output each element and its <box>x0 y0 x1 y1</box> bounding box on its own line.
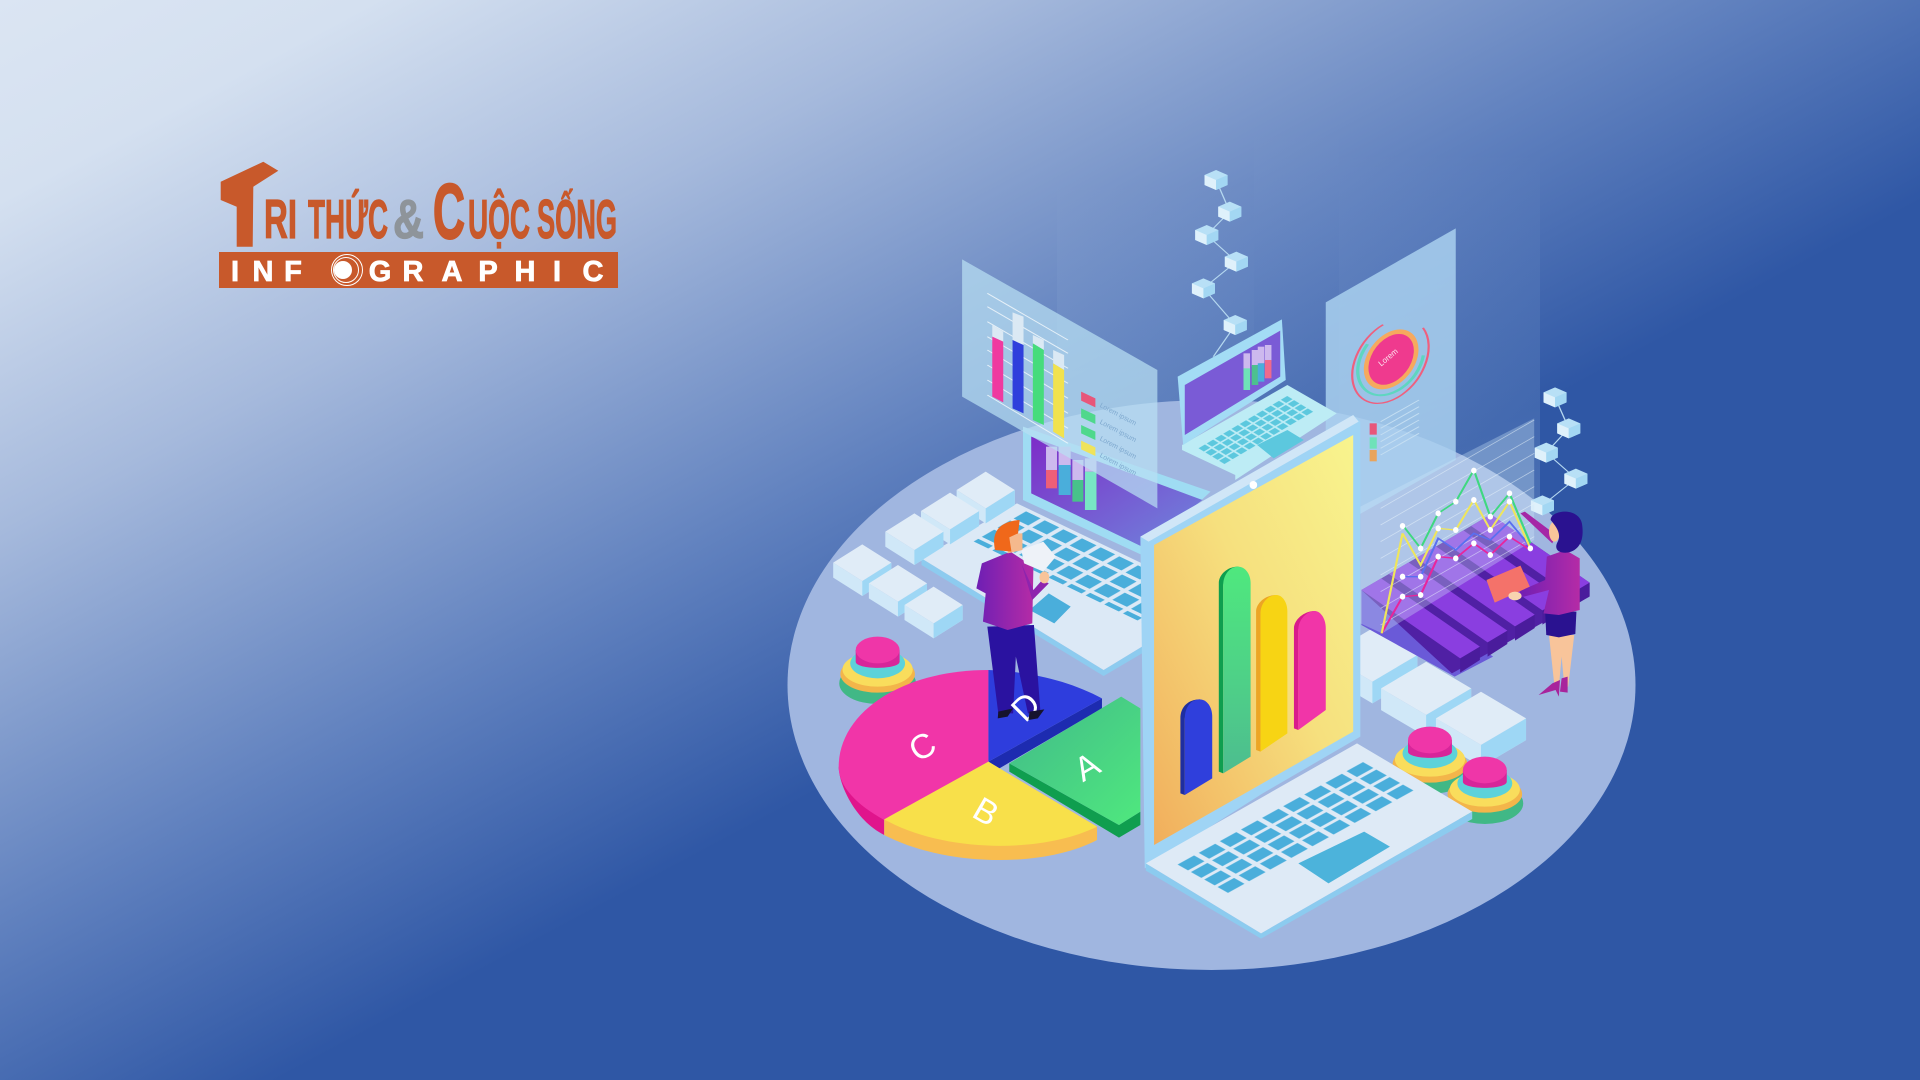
folder <box>1486 566 1530 603</box>
screen <box>1031 437 1202 547</box>
right key blocks <box>1327 628 1526 767</box>
right molecule chain <box>1531 387 1587 515</box>
laptop screen frame <box>1178 319 1286 445</box>
banner text: INF <box>231 256 302 288</box>
laptop base <box>1146 743 1472 939</box>
chart grid <box>1381 420 1534 625</box>
laptop screen <box>1185 331 1280 435</box>
slice A <box>1009 697 1140 838</box>
donut label: Lorem <box>1377 347 1400 368</box>
light beams <box>1057 120 1540 640</box>
screen frame <box>1023 427 1211 555</box>
left key blocks <box>833 472 1015 638</box>
pie letters: B <box>966 790 1005 834</box>
big back laptop <box>922 427 1250 676</box>
jacket <box>976 552 1033 630</box>
panel legend: Lorem ipsum <box>1098 452 1137 477</box>
legend swatches <box>1370 423 1377 461</box>
tablet top bezel <box>1140 415 1359 542</box>
pie letters: C <box>902 725 943 770</box>
tablet frame <box>1140 415 1360 868</box>
head <box>1008 533 1022 553</box>
touchpad <box>1030 593 1071 623</box>
hair <box>1551 512 1583 553</box>
screen bars <box>1046 447 1096 510</box>
big laptop with chart <box>1140 415 1472 939</box>
touchpad <box>1298 832 1390 883</box>
logo: Tri Thức & Cuộc Sống Infographic <box>219 162 618 288</box>
tablet screen <box>1154 435 1353 845</box>
pink bar <box>1294 611 1326 730</box>
platform ellipse <box>788 400 1636 970</box>
logo wordmark: & <box>393 188 424 250</box>
base top <box>1146 743 1472 933</box>
chart lines <box>1382 470 1530 633</box>
purple isometric platform <box>1361 514 1590 677</box>
shoes <box>998 708 1044 720</box>
hand <box>1039 571 1049 583</box>
platform base <box>1361 514 1590 673</box>
panel bar chart <box>992 312 1064 438</box>
right ring stacks <box>1392 727 1523 824</box>
hair <box>994 520 1020 552</box>
platform left face <box>1361 590 1493 677</box>
panel legend <box>1081 392 1137 477</box>
logo wordmark <box>264 167 617 255</box>
panel legend: Lorem ipsum <box>1098 436 1137 461</box>
logo wordmark: RI <box>264 188 297 250</box>
laptop base <box>1182 385 1337 480</box>
upper molecule chain <box>1192 170 1248 357</box>
donut caption lines <box>1381 400 1419 455</box>
panel grid lines <box>987 293 1068 443</box>
pie letters: A <box>1068 745 1107 789</box>
legs <box>987 625 1041 713</box>
arm <box>1021 563 1049 600</box>
green bar <box>1219 567 1251 773</box>
pie chart <box>839 670 1140 860</box>
keys <box>972 509 1250 648</box>
small back laptop <box>1178 319 1337 480</box>
right floating panel <box>1326 228 1456 533</box>
laptop touchpad <box>1257 430 1304 458</box>
logo: Tri Thức & Cuộc Sống Infographic: SỐNG <box>537 188 617 250</box>
logo wordmark: C <box>433 167 465 255</box>
yellow bar <box>1256 595 1287 752</box>
isometric illustration <box>833 170 1590 939</box>
woman figure <box>1486 512 1583 697</box>
logo wordmark: UỘC <box>468 188 530 250</box>
screen bars <box>1243 345 1271 390</box>
hand <box>1508 592 1522 600</box>
heels <box>1539 677 1568 697</box>
pie letters <box>902 725 1107 834</box>
slice D <box>988 670 1102 768</box>
man figure <box>976 520 1056 729</box>
slice C <box>839 670 988 835</box>
raised arm <box>1520 512 1556 543</box>
base <box>922 503 1142 670</box>
face <box>1549 522 1560 542</box>
banner O icon <box>332 254 362 286</box>
logo wordmark: THỨC <box>308 188 388 250</box>
slice B <box>884 762 1097 860</box>
legs <box>1549 635 1574 687</box>
logo T mark <box>221 162 278 247</box>
donut chart <box>1339 314 1442 408</box>
D letter on floor: D <box>1004 685 1048 729</box>
chart nodes <box>1400 468 1533 600</box>
left ring stack <box>839 637 916 704</box>
laptop keys <box>1197 395 1315 465</box>
keyboard <box>1174 760 1417 895</box>
line chart panel <box>1360 418 1534 633</box>
jacket <box>1518 550 1580 615</box>
webcam <box>1250 481 1257 489</box>
blue bar <box>1180 699 1212 795</box>
logo banner <box>219 252 618 288</box>
base edge <box>922 558 1142 676</box>
base edge <box>1146 812 1472 939</box>
platform bars <box>1361 514 1590 673</box>
panel legend: Lorem ipsum <box>1098 419 1137 444</box>
left floating panel <box>962 259 1157 508</box>
skirt <box>1545 612 1576 637</box>
banner text continued: GRAPHIC <box>369 256 604 288</box>
panel legend: Lorem ipsum <box>1098 402 1137 427</box>
paper <box>1021 542 1056 572</box>
bar chart <box>1180 567 1326 795</box>
